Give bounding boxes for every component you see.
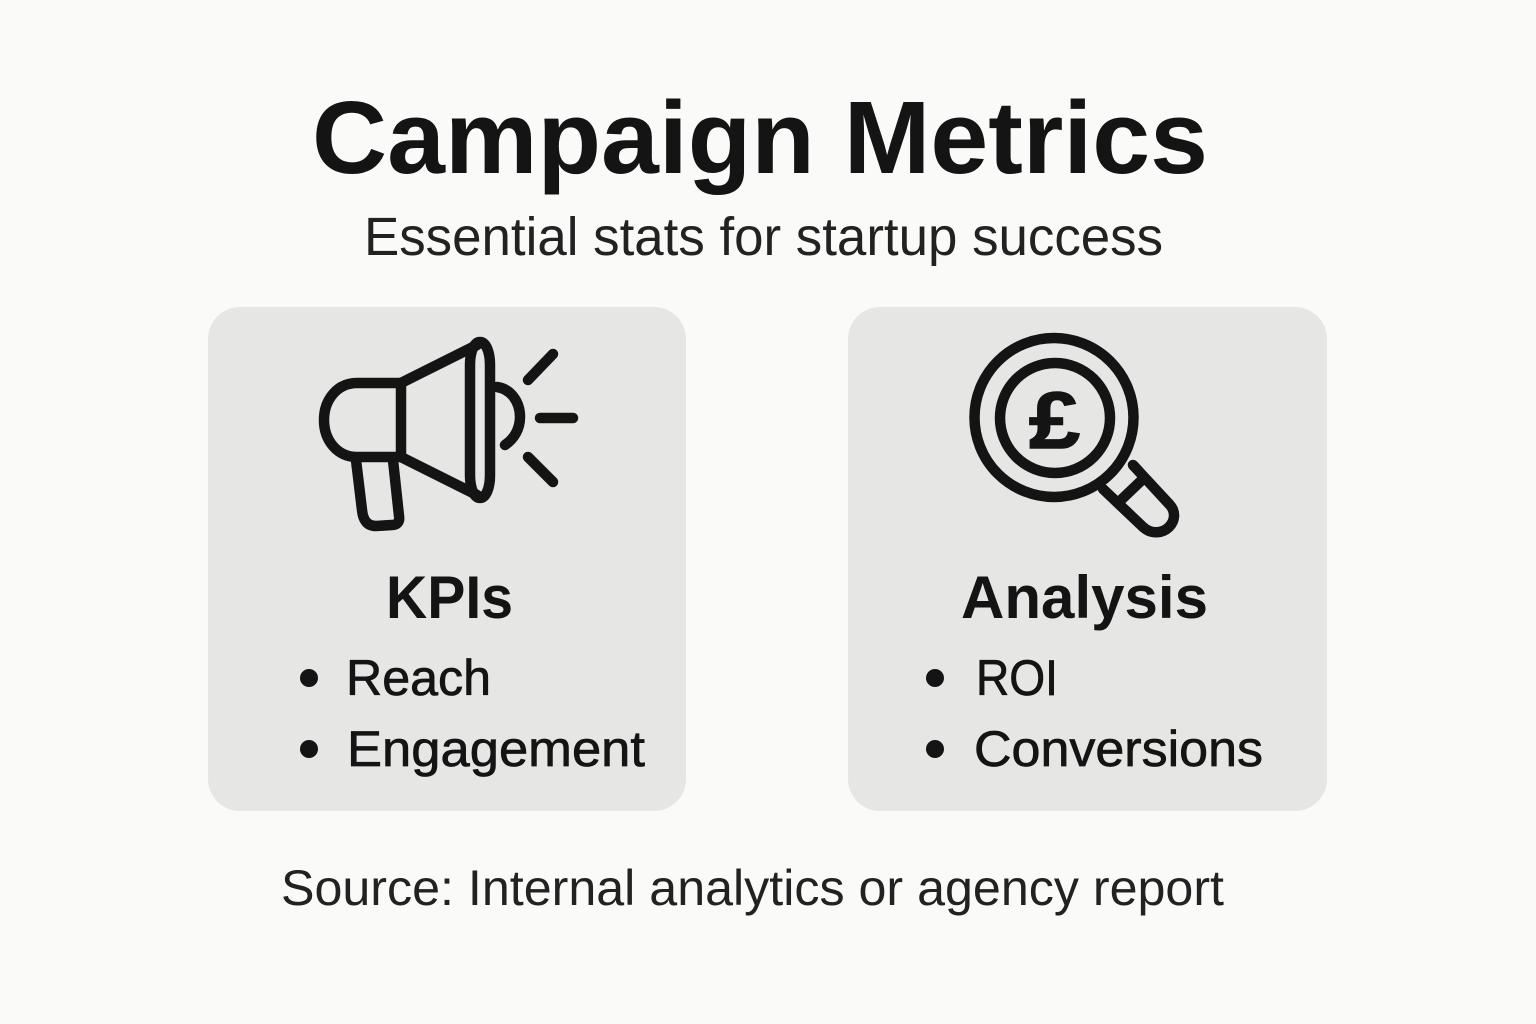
bullet	[926, 740, 944, 758]
panel background: KPIs	[208, 307, 686, 811]
list item: ROI: ROI	[976, 650, 1058, 706]
panel background: Analysis	[848, 307, 1327, 811]
heading: Analysis: Analysis	[961, 564, 1208, 631]
icon: megaphone	[324, 342, 573, 526]
title: Campaign Metrics	[312, 80, 1208, 195]
bullet	[300, 669, 318, 687]
list item: Reach: Reach	[346, 650, 491, 706]
bullet	[300, 740, 318, 758]
list item: Conversions: Conversions	[974, 721, 1263, 777]
icon: magnifying glass with pound sign	[974, 338, 1174, 532]
panel: KPIs	[208, 307, 686, 811]
source note: Source: Internal analytics or agency report	[281, 860, 1224, 916]
bullet	[926, 669, 944, 687]
list item: Engagement: Engagement	[347, 721, 645, 777]
magnifier outline	[974, 338, 1174, 532]
list: KPIs	[300, 650, 645, 777]
subtitle: Essential stats for startup success	[364, 207, 1163, 267]
list: Analysis	[926, 650, 1263, 777]
panel: Analysis	[848, 307, 1327, 811]
icon glyph: pound sign: £	[1029, 376, 1080, 465]
heading: KPIs: KPIs	[386, 564, 513, 631]
